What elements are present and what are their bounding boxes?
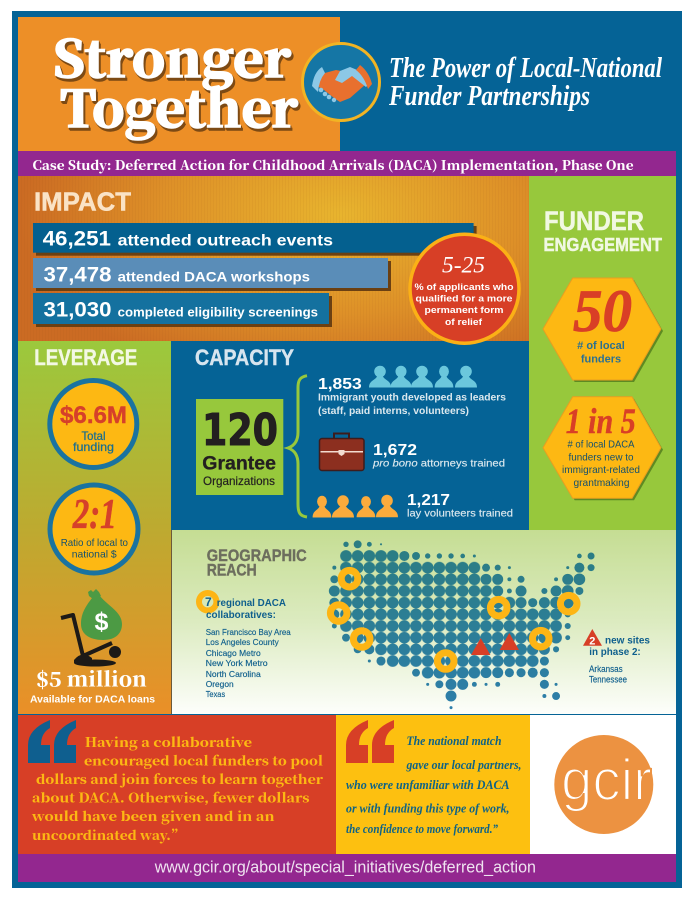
- badge: total funding: Total: [82, 429, 106, 443]
- stat: 5 million loans: [30, 664, 155, 706]
- bar: DACA workshops: 37,478: [44, 264, 112, 287]
- badge: ratio: Ratio of local to: [61, 537, 128, 549]
- panel: red quote: [18, 715, 336, 854]
- badge: ratio: 2:1: [72, 492, 117, 538]
- callout: 5-25 percent: permanent form: [424, 305, 504, 316]
- title: Stronger Together: Stronger: [53, 20, 291, 92]
- stat: lay volunteers: lay volunteers trained: [407, 508, 513, 520]
- bar: DACA workshops: [33, 258, 391, 291]
- icon: money bag on hand truck: $: [95, 608, 109, 636]
- badge: total funding: $6.6M: [60, 402, 127, 429]
- bar: eligibility screenings: 31,030: [44, 299, 112, 322]
- quote text: [346, 734, 522, 836]
- list: collaboratives: Los Angeles County: [206, 637, 279, 647]
- stat: lay volunteers: 1,217: [407, 492, 450, 509]
- stat: immigrant youth: (staff, paid interns, volunteers): [318, 406, 469, 417]
- markers: phase 2 triangles: [471, 633, 519, 655]
- legend: 7 regional collaboratives: [199, 593, 291, 699]
- heading: funder engagement: [544, 206, 662, 255]
- quote text: encouraged local funders to pool: [84, 751, 323, 770]
- bar: eligibility screenings: [33, 293, 332, 327]
- list: collaboratives: New York Metro: [206, 658, 268, 668]
- box: 120 grantee organizations: [196, 399, 283, 495]
- badge: total funding: [50, 380, 137, 468]
- stat: 5 million loans: $5 million: [36, 664, 147, 693]
- quote text: who were unfamiliar with DACA: [346, 778, 510, 792]
- hexagon: 1 in 5: # of local DACA: [568, 439, 634, 451]
- legend: 2 new sites: in phase 2:: [589, 646, 641, 658]
- legend: 2 new sites: [583, 629, 650, 685]
- badge: total funding: funding: [73, 440, 114, 454]
- list: collaboratives: San Francisco Bay Area: [206, 627, 291, 637]
- quote text: uncoordinated way.”: [32, 825, 184, 844]
- quote text: Having a collaborative: [85, 732, 252, 751]
- stat: 5 million loans: Available for DACA loans: [30, 695, 155, 706]
- panel: gcir logo: gcir: [561, 748, 652, 813]
- callout: 5-25 percent: 5-25: [442, 253, 485, 278]
- case study banner: [18, 151, 676, 176]
- list: collaboratives: [206, 627, 291, 699]
- quote text: gave our local partners,: [406, 758, 522, 772]
- legend: 7 regional collaboratives: 7: [205, 595, 212, 609]
- heading: impact: IMPACT: [34, 187, 131, 217]
- hexagon: 50 local funders: funders: [581, 354, 621, 366]
- heading: leverage: LEVERAGE: [34, 345, 137, 370]
- callout: 5-25 percent: % of applicants who: [414, 282, 514, 293]
- badge: ratio: [50, 485, 138, 573]
- box: 120 grantee organizations: Grantee: [202, 453, 276, 474]
- heading: geographic reach: [207, 547, 307, 580]
- legend: 2 new sites: 2: [589, 636, 595, 648]
- title: Stronger Together: [53, 20, 298, 142]
- stat: immigrant youth: [318, 366, 506, 417]
- stat: pro bono attorneys: [320, 434, 505, 470]
- box: 120 grantee organizations: Organizations: [203, 474, 275, 488]
- quote text: or with funding this type of work,: [346, 802, 510, 816]
- panel: impact: [18, 176, 529, 341]
- subtitle: Funder Partnerships: [388, 81, 590, 112]
- box: 120 grantee organizations: 120: [202, 405, 278, 456]
- panel: leverage: [18, 341, 171, 714]
- quote text: dollars and join forces to learn together: [36, 769, 323, 788]
- hexagon: 1 in 5: immigrant-related: [562, 464, 640, 476]
- heading: funder engagement: ENGAGEMENT: [544, 235, 662, 255]
- stat: pro bono attorneys: pro bono attorneys trained: [372, 458, 505, 470]
- quote text: would have been given and in an: [31, 806, 274, 825]
- legend: 7 regional collaboratives: collaboratives:: [206, 609, 276, 621]
- callout: 5-25 percent: [408, 233, 520, 345]
- icon: light blue people: [369, 366, 477, 388]
- list: collaboratives: Texas: [206, 689, 225, 699]
- icon: briefcase: [320, 434, 364, 470]
- panel: gcir logo: [530, 715, 676, 854]
- heading: capacity: CAPACITY: [195, 345, 294, 370]
- hexagon: 1 in 5: grantmaking: [574, 477, 630, 489]
- badge: ratio: national $: [72, 549, 117, 561]
- stat: immigrant youth: 1,853: [318, 376, 362, 393]
- brace: [288, 376, 307, 517]
- quote text: The national match: [406, 734, 502, 748]
- legend: 2 new sites: new sites: [605, 634, 650, 646]
- bar: outreach events: [33, 223, 477, 256]
- hexagon: 50 local funders: # of local: [577, 340, 625, 352]
- panel: yellow quote: [336, 715, 530, 854]
- footer URL bar: [18, 854, 676, 882]
- icon: quote mark blue: [28, 720, 76, 763]
- list: collaboratives: Oregon: [206, 679, 234, 689]
- bar: DACA workshops: attended DACA workshops: [118, 269, 310, 285]
- hexagon: 50 local funders: 50: [573, 278, 632, 344]
- quote text: about DACA. Otherwise, fewer dollars: [32, 788, 310, 807]
- hexagon: 1 in 5: [543, 397, 663, 500]
- legend: 2 new sites: Tennessee: [589, 675, 627, 685]
- bar: outreach events: attended outreach events: [118, 233, 333, 250]
- icon: orange people: [313, 495, 398, 518]
- heading: geographic reach: GEOGRAPHIC: [207, 547, 307, 565]
- list: collaboratives: North Carolina: [206, 669, 261, 679]
- case study banner: Case Study: Deferred Action for Childhood Arrivals (DACA) Implementation, Phase One: [32, 155, 634, 174]
- stat: pro bono attorneys: 1,672: [373, 442, 417, 459]
- map: dotted United States: [326, 540, 595, 710]
- hexagon: 1 in 5: funders new to: [568, 452, 634, 464]
- heading: funder engagement: FUNDER: [544, 206, 644, 236]
- markers: collaborative rings: [330, 570, 577, 669]
- subtitle: [388, 53, 662, 112]
- icon: money bag on hand truck: [61, 589, 122, 666]
- icon: quote mark red: [346, 720, 394, 763]
- hexagon: 1 in 5: 1 in 5: [566, 401, 636, 441]
- panel: geographic reach: [171, 530, 676, 714]
- list: collaboratives: Chicago Metro: [206, 648, 261, 658]
- quote text: [31, 732, 323, 844]
- legend: 2 new sites: Arkansas: [589, 664, 623, 674]
- icon: handshake badge: [302, 44, 380, 120]
- legend: 7 regional collaboratives: regional DACA: [217, 597, 286, 609]
- bar: eligibility screenings: completed eligibility screenings: [118, 306, 318, 320]
- callout: 5-25 percent: of relief: [445, 317, 483, 328]
- quote text: the confidence to move forward.”: [346, 822, 499, 836]
- footer URL bar: www.gcir.org/about/special_initiatives/deferred_action: [154, 858, 536, 877]
- hexagon: 50 local funders: [543, 278, 663, 382]
- heading: geographic reach: REACH: [207, 562, 257, 580]
- stat: immigrant youth: Immigrant youth developed as leaders: [318, 393, 506, 404]
- panel: capacity: [171, 341, 529, 530]
- title: Stronger Together: Together: [60, 70, 298, 142]
- callout: 5-25 percent: qualified for a more: [416, 294, 512, 304]
- panel: funder engagement: [529, 176, 676, 530]
- title panel: [18, 17, 340, 151]
- bar: outreach events: 46,251: [43, 228, 111, 251]
- stat: lay volunteers: [313, 492, 513, 520]
